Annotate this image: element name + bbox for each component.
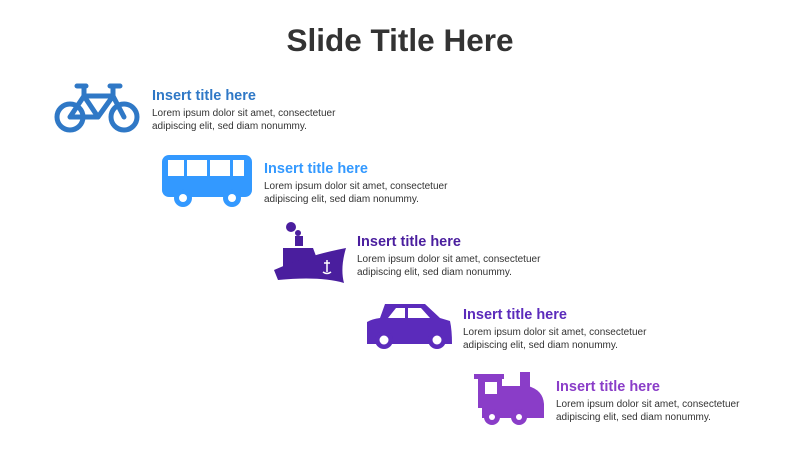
- icon: bicycle: [57, 86, 137, 130]
- item 1 text: Lorem ipsum dolor sit amet, consectetuer: [152, 108, 335, 119]
- icon: train: [474, 372, 544, 425]
- title: Slide Title Here: [286, 22, 514, 58]
- item 1 text: adipiscing elit, sed diam nonummy.: [152, 121, 307, 132]
- item 2 text: [264, 161, 448, 205]
- icon: car: [367, 304, 452, 349]
- item 3 text: [357, 234, 540, 278]
- item 2 text: adipiscing elit, sed diam nonummy.: [264, 194, 419, 205]
- item 1 text: [152, 88, 336, 132]
- item 5 text: Lorem ipsum dolor sit amet, consectetuer: [556, 399, 739, 410]
- item 3 text: Lorem ipsum dolor sit amet, consectetuer: [357, 254, 540, 265]
- icon: ship: [274, 222, 346, 283]
- item 4 text: Insert title here: [463, 307, 567, 323]
- item 3 text: adipiscing elit, sed diam nonummy.: [357, 267, 512, 278]
- item 5 text: [556, 379, 740, 423]
- item 5 text: Insert title here: [556, 379, 660, 395]
- item 1 text: Insert title here: [152, 88, 256, 104]
- item 2 text: Lorem ipsum dolor sit amet, consectetuer: [264, 181, 447, 192]
- icon: bus: [162, 155, 252, 207]
- item 5 text: adipiscing elit, sed diam nonummy.: [556, 412, 711, 423]
- item 2 text: Insert title here: [264, 161, 368, 177]
- item 4 text: Lorem ipsum dolor sit amet, consectetuer: [463, 327, 646, 338]
- item 4 text: [463, 307, 646, 351]
- item 4 text: adipiscing elit, sed diam nonummy.: [463, 340, 618, 351]
- item 3 text: Insert title here: [357, 234, 461, 250]
